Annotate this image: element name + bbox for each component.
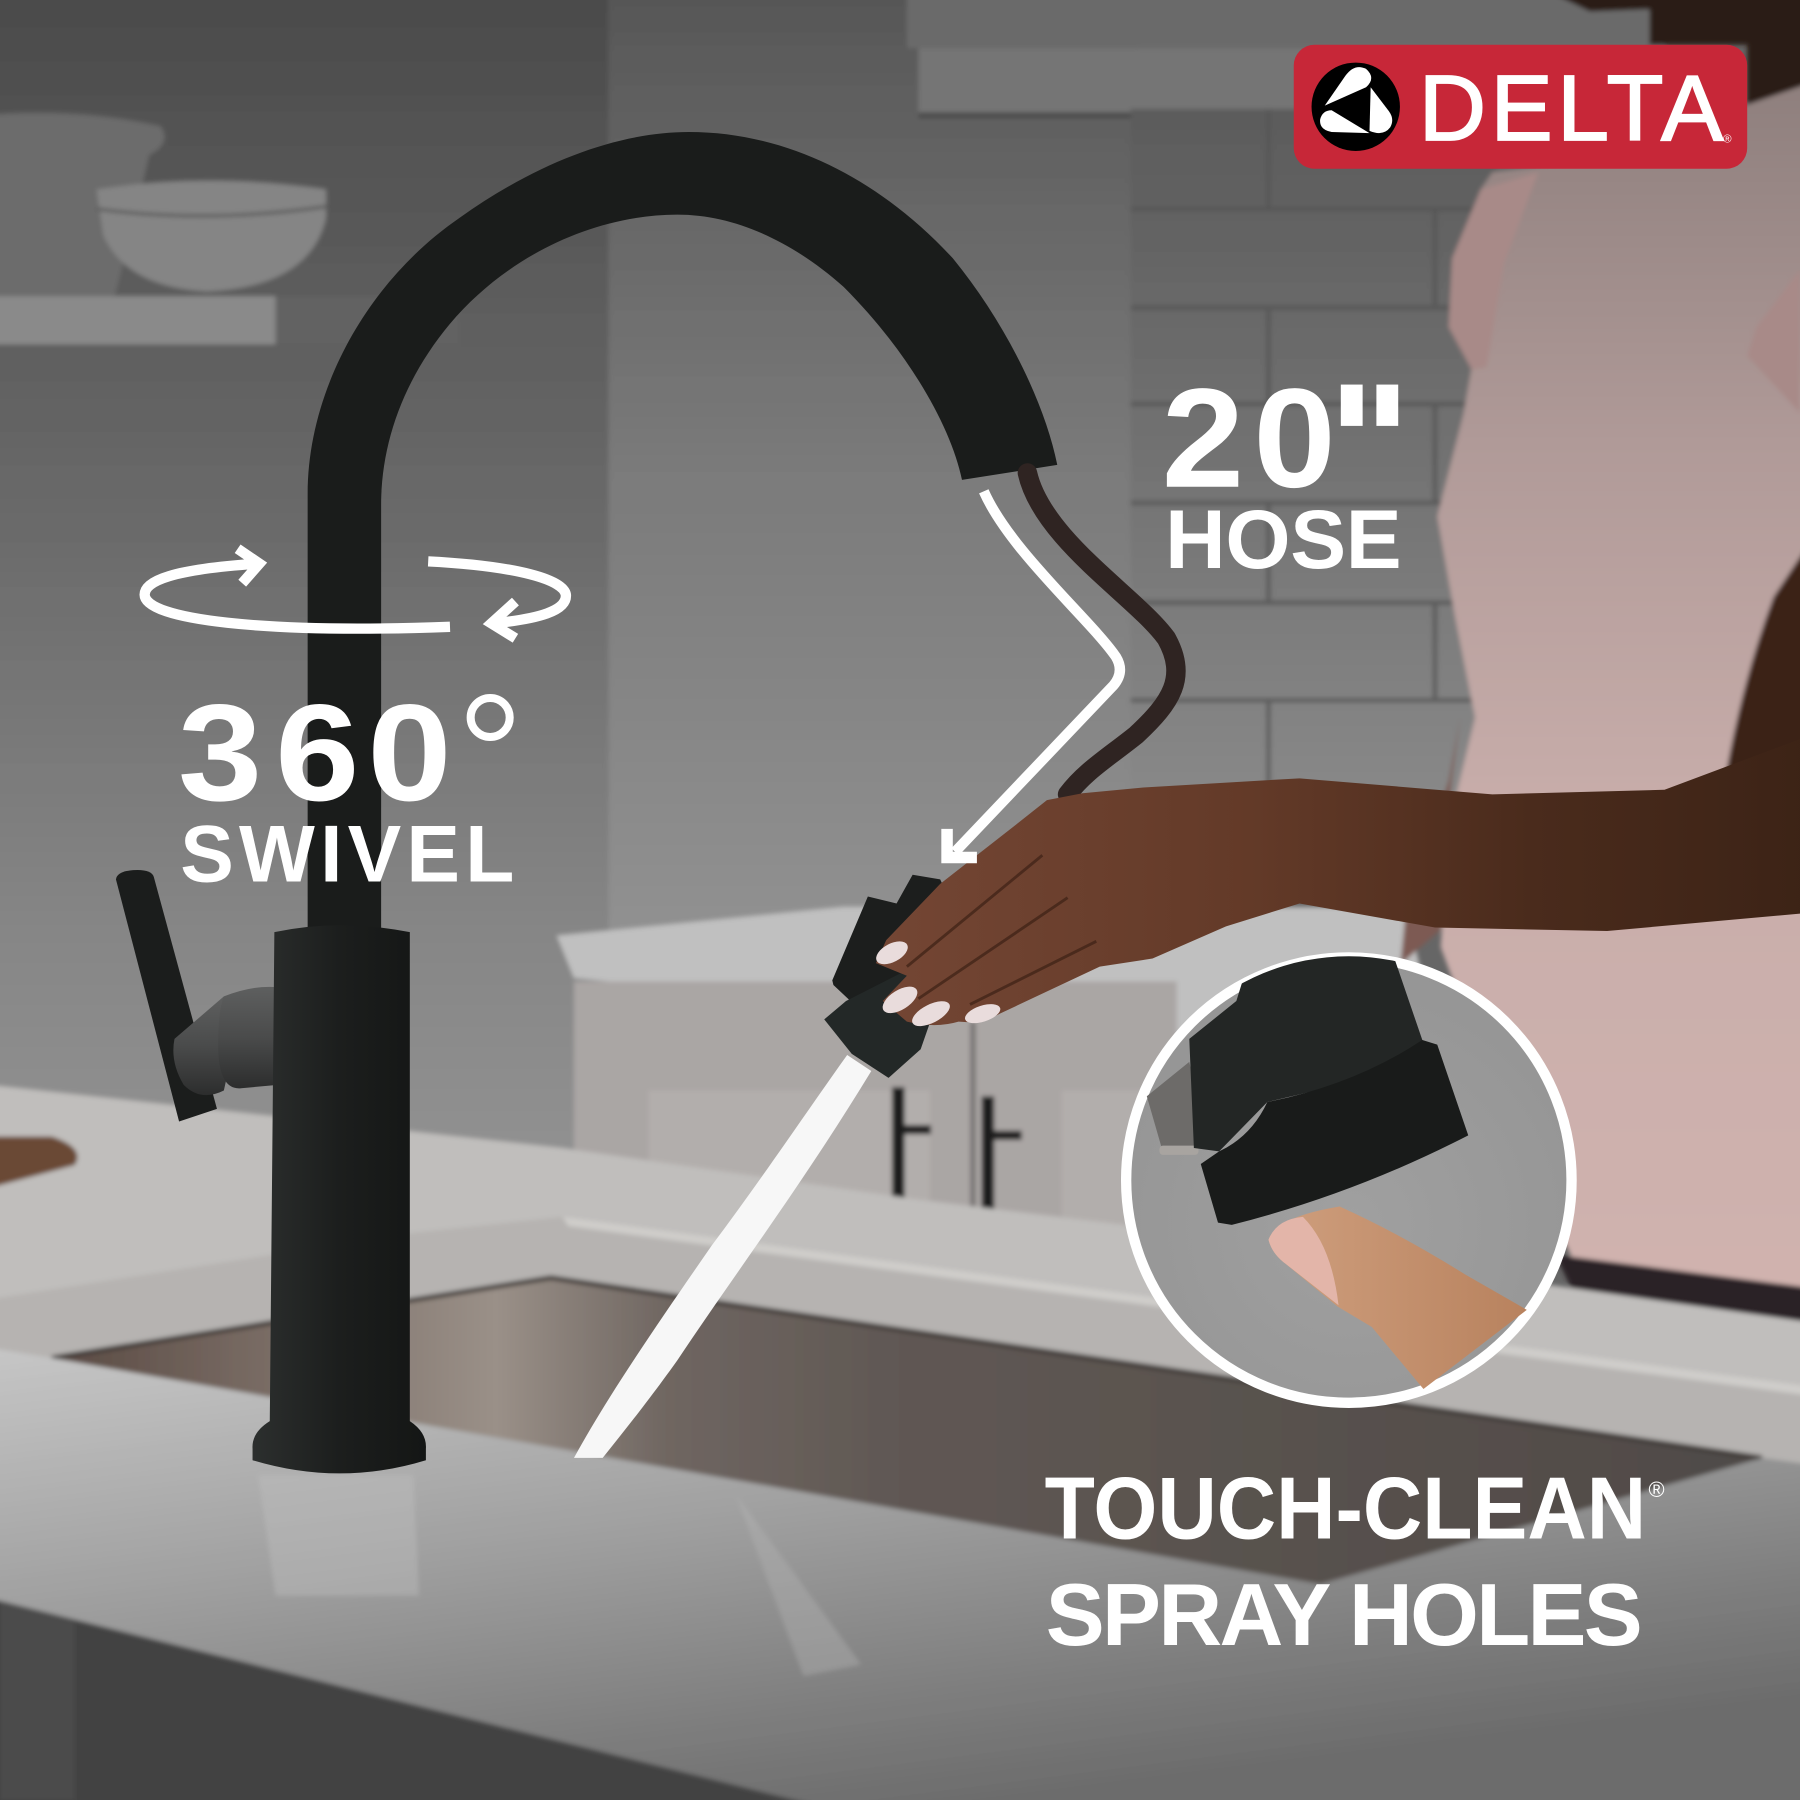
20 inch hose label: HOSE (1165, 492, 1402, 586)
touch-clean spray holes label: TOUCH-CLEAN (1045, 1458, 1646, 1557)
far arm (1722, 540, 1800, 804)
water stream (574, 1055, 871, 1458)
brand logo badge: DELTA (1419, 56, 1723, 160)
brand logo badge (1294, 45, 1747, 169)
lower cabinets (574, 982, 1177, 1257)
pull-down sprayer (824, 875, 953, 1078)
neck (1650, 0, 1800, 126)
fingernail (1268, 1217, 1339, 1305)
swivel arrows icon (145, 549, 566, 638)
finger (1268, 1207, 1527, 1389)
belt (1555, 1255, 1800, 1322)
hose arrow (947, 491, 1120, 858)
20 inch hose label (1162, 359, 1402, 586)
cutting board (0, 1136, 77, 1188)
counter back surface (0, 1085, 1800, 1475)
finger creases (907, 855, 1096, 1004)
faucet (116, 132, 1057, 1473)
center wall (608, 0, 1136, 941)
touch-clean spray holes label (1045, 1458, 1665, 1664)
20 inch hose label: 20 (1162, 359, 1336, 517)
tile wall (1131, 109, 1498, 798)
360 degree swivel label: SWIVEL (180, 810, 514, 900)
lever handle (116, 870, 217, 1122)
left wall (0, 0, 608, 1251)
sink basin (52, 1278, 1762, 1584)
touch-clean spray holes label: SPRAY HOLES (1046, 1565, 1643, 1664)
brand logo badge: ® (1723, 133, 1732, 145)
360 degree swivel label: 360 (178, 676, 452, 830)
body (252, 925, 426, 1473)
touch-clean close-up circle (1126, 953, 1572, 1403)
wall shelf with bowls (0, 113, 459, 344)
handle connector (173, 987, 278, 1095)
lower cabinet front (0, 1598, 827, 1800)
sprayer head close-up (1147, 953, 1468, 1225)
360 degree swivel label (178, 676, 514, 900)
sink rim (0, 1217, 1800, 1475)
woman's top (1437, 83, 1800, 1295)
shirt ruffles (1449, 172, 1800, 413)
spout arc (308, 132, 1057, 932)
front counter (0, 1348, 1800, 1800)
dress shadow (1401, 717, 1460, 964)
back counter (557, 907, 1435, 1035)
hand and forearm (876, 735, 1800, 1025)
upper cabinet (907, 0, 1665, 118)
braided hose (1027, 473, 1176, 794)
touch-clean spray holes label: ® (1648, 1477, 1665, 1502)
fingernails (872, 937, 1003, 1031)
